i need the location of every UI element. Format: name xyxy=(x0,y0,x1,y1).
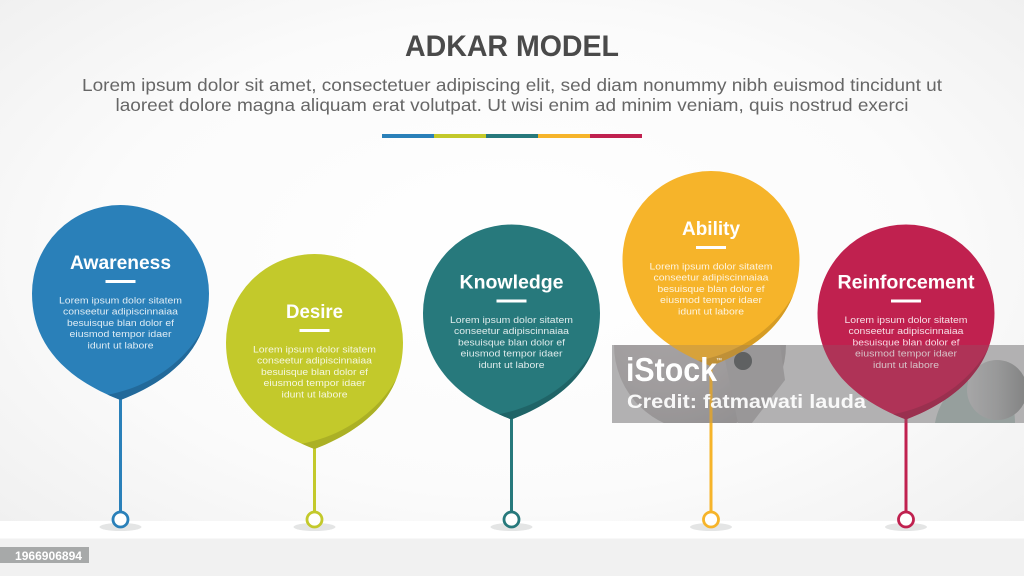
body: Knowledge: conseetur adipiscinnaiaa xyxy=(454,326,570,337)
body: Desire xyxy=(253,344,376,400)
body: Desire: idunt ut labore xyxy=(282,390,348,400)
watermark credit: Credit: fatmawati lauda xyxy=(627,392,866,413)
title: ADKAR MODEL xyxy=(405,30,619,63)
body: Reinforcement: eiusmod tempor idaer xyxy=(855,349,958,360)
heading: Reinforcement: Reinforcement xyxy=(838,272,975,294)
intro text: Lorem ipsum dolor sit amet, consectetuer adipiscing elit, sed diam nonummy nibh euismod tincidunt ut xyxy=(82,75,942,95)
body: Ability: Lorem ipsum dolor sitatem xyxy=(649,262,773,272)
pin: Awareness xyxy=(32,205,220,531)
body: Reinforcement: besuisque blan dolor ef xyxy=(852,338,960,348)
body: Desire: Lorem ipsum dolor sitatem xyxy=(253,344,376,356)
watermark backdrop xyxy=(612,345,1024,423)
heading: Desire: Desire xyxy=(286,302,343,323)
body: Ability xyxy=(650,262,772,318)
watermark trademark: ™ xyxy=(716,357,722,364)
heading: Awareness: Awareness xyxy=(70,253,171,274)
watermark logo: iStock xyxy=(626,351,718,388)
body: Knowledge: eiusmod tempor idaer xyxy=(460,349,563,360)
body: Desire: conseetur adipiscinnaiaa xyxy=(257,356,373,367)
heading: Ability: Ability xyxy=(682,219,740,240)
body: Knowledge: Lorem ipsum dolor sitatem xyxy=(450,315,573,326)
body: Knowledge xyxy=(450,315,573,371)
colour divider xyxy=(382,134,642,138)
body: Ability: besuisque blan dolor ef xyxy=(658,284,765,295)
body: Desire: besuisque blan dolor ef xyxy=(261,367,368,378)
intro text xyxy=(82,75,942,115)
pin: Reinforcement xyxy=(818,224,1006,531)
watermark band xyxy=(612,345,1024,423)
body: Reinforcement: idunt ut labore xyxy=(873,360,939,371)
pin: Knowledge xyxy=(423,224,612,531)
body: Awareness: idunt ut labore xyxy=(88,340,154,352)
image id tag xyxy=(0,547,89,563)
body: Reinforcement: conseetur adipiscinnaiaa xyxy=(848,326,964,337)
body: Knowledge: idunt ut labore xyxy=(478,360,544,371)
pin: Ability xyxy=(622,171,811,531)
heading: Knowledge: Knowledge xyxy=(460,272,564,294)
body: Ability: eiusmod tempor idaer xyxy=(660,295,763,306)
image id tag: 1966906894 xyxy=(15,551,83,563)
body: Desire: eiusmod tempor idaer xyxy=(264,378,366,389)
body: Reinforcement xyxy=(844,315,968,371)
intro text: laoreet dolore magna aliquam erat volutpat. Ut wisi enim ad minim veniam, quis nostrud exerci xyxy=(116,95,908,115)
body: Awareness: eiusmod tempor idaer xyxy=(70,329,172,340)
body: Awareness xyxy=(59,296,182,352)
body: Ability: conseetur adipiscinnaiaa xyxy=(654,273,769,284)
pin: Desire xyxy=(226,254,414,531)
body: Reinforcement: Lorem ipsum dolor sitatem xyxy=(844,315,968,326)
body: Awareness: besuisque blan dolor ef xyxy=(67,318,174,329)
body: Awareness: Lorem ipsum dolor sitatem xyxy=(59,296,182,306)
body: Knowledge: besuisque blan dolor ef xyxy=(458,338,565,348)
body: Ability: idunt ut labore xyxy=(678,306,744,318)
body: Awareness: conseetur adipiscinnaiaa xyxy=(63,307,179,318)
